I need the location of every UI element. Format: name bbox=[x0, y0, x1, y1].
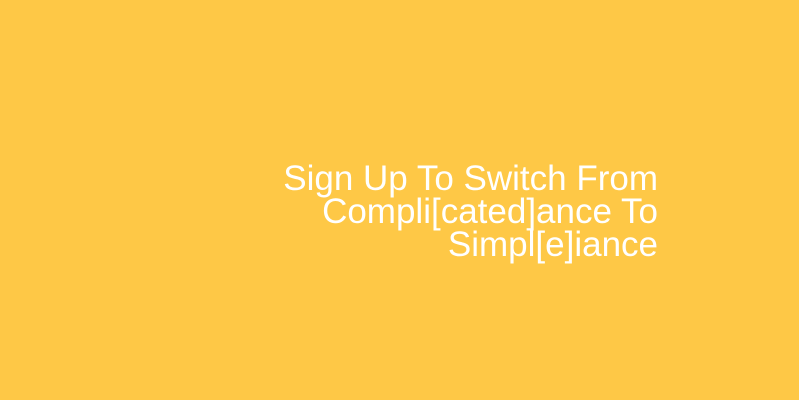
heading text bbox=[283, 159, 658, 264]
heading text: Simpl[e]iance bbox=[448, 225, 658, 264]
heading text: Sign Up To Switch From bbox=[283, 159, 658, 198]
heading text: Compli[cated]ance To bbox=[322, 192, 658, 231]
